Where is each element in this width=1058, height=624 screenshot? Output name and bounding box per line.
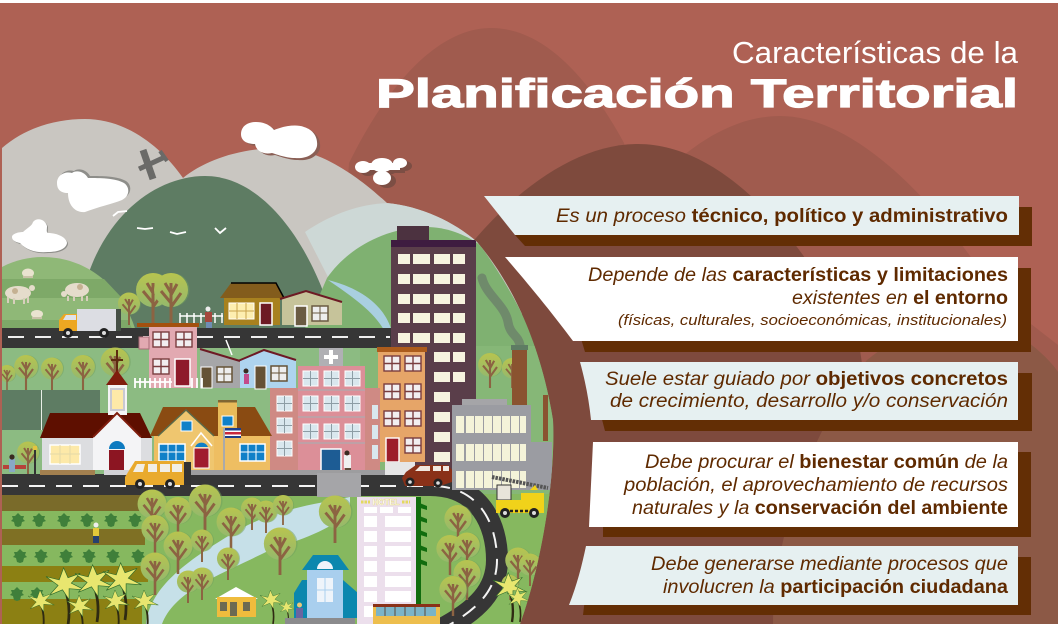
- truck: [59, 309, 121, 338]
- clouds: [12, 122, 412, 253]
- airplane: [139, 150, 167, 179]
- tour bus: [373, 604, 440, 624]
- sheep and cows: [5, 268, 89, 319]
- item 3 box: [580, 362, 1018, 420]
- grey mountains: [2, 119, 522, 314]
- factory trees: [478, 353, 512, 388]
- item 1 text: Es un proceso técnico, político y administrativo: [556, 206, 1008, 227]
- trees behind road: [118, 273, 190, 325]
- title: [376, 35, 1019, 116]
- item 2 text: existentes en el entorno: [792, 288, 1008, 309]
- item 5 text: [651, 554, 1008, 598]
- lower green ground: [142, 494, 562, 624]
- item 4 shadow: [603, 452, 1031, 537]
- church tower cross: [111, 350, 123, 372]
- title line two: Planificación Territorial: [376, 72, 1018, 116]
- white top strip: [0, 0, 1058, 3]
- item 1 box: [484, 196, 1019, 235]
- item 3 text: Suele estar guiado por objetivos concretos: [605, 369, 1008, 390]
- item 3 text: [605, 369, 1008, 412]
- item 4 text: Debe procurar el bienestar común de la: [645, 452, 1008, 473]
- item 4 text: [623, 452, 1009, 519]
- cloud top centre: [241, 122, 320, 160]
- hillside at right mid ground: [360, 346, 560, 496]
- orange building: [377, 347, 427, 475]
- small yellow house: [215, 587, 258, 617]
- panel: item 5: [569, 546, 1031, 615]
- bright green hill: [300, 227, 560, 624]
- crane truck: [492, 477, 548, 518]
- pale translucent hill: [305, 203, 480, 276]
- item 2 text: [588, 265, 1008, 329]
- smoke: [482, 278, 520, 345]
- cloud left large: [57, 169, 130, 212]
- item 4 text: población, el aprovechamiento de recursos: [623, 475, 1009, 496]
- pink house: [135, 323, 202, 388]
- terraced fields: [2, 495, 148, 624]
- item 3 text: de crecimiento, desarrollo y/o conservación: [610, 391, 1008, 412]
- grey house: [200, 340, 240, 388]
- item 5 shadow: [583, 557, 1031, 615]
- road bend: [2, 485, 497, 624]
- panel: item 4: [589, 442, 1031, 537]
- item 1 shadow: [515, 207, 1032, 246]
- item 2 box: [505, 257, 1018, 341]
- panel: item 2: [505, 257, 1031, 352]
- illustrated town scene: [0, 119, 562, 624]
- river upper: [328, 280, 392, 332]
- hotel: HOTEL: [372, 498, 400, 507]
- hotel: [357, 497, 427, 624]
- yellow house: [150, 400, 272, 475]
- panel: item 3: [580, 362, 1032, 431]
- background hills: [340, 28, 1058, 624]
- field worker: [93, 522, 99, 543]
- crossing: [317, 473, 361, 497]
- school bus: [125, 461, 191, 489]
- item 2 text: Depende de las características y limitaciones: [588, 265, 1008, 286]
- light green pasture hill: [2, 257, 135, 328]
- dark green mountain: [90, 176, 322, 328]
- title line one: Características de la: [732, 35, 1019, 70]
- brown house: [220, 283, 284, 325]
- birds: [90, 202, 226, 234]
- item 3 shadow: [590, 373, 1032, 431]
- blue villa: [285, 555, 358, 624]
- dark tower building: [391, 226, 476, 490]
- farmer and fence: [180, 306, 223, 328]
- item 2 text: (físicas, culturales, socioeconómicas, institucionales): [618, 313, 1007, 329]
- river: [146, 497, 350, 624]
- item 5 text: involucren la participación ciudadana: [663, 577, 1008, 598]
- row of trees: [0, 348, 131, 390]
- panel: item 1: [484, 196, 1032, 246]
- palms by the house: [260, 573, 530, 624]
- item 5 text: Debe generarse mediante procesos que: [651, 554, 1008, 575]
- orchard trees: [138, 484, 542, 616]
- chimney: [511, 345, 548, 441]
- item 5 box: [569, 546, 1018, 605]
- beige house: [280, 291, 342, 326]
- item 2 shadow: [560, 268, 1031, 352]
- church: [40, 370, 152, 475]
- item 4 text: naturales y la conservación del ambiente: [632, 498, 1008, 519]
- clinic: [319, 348, 343, 366]
- factory: [452, 399, 552, 490]
- pink building: [270, 366, 385, 475]
- park bench and person: [3, 442, 40, 474]
- red car: [402, 465, 452, 488]
- palm trees: [28, 563, 158, 624]
- cloud small right: [355, 158, 412, 188]
- item 4 box: [589, 442, 1018, 527]
- top road: [2, 328, 392, 348]
- cloud left small: [12, 219, 68, 253]
- mid ground: [2, 348, 360, 474]
- blue house: [238, 349, 296, 389]
